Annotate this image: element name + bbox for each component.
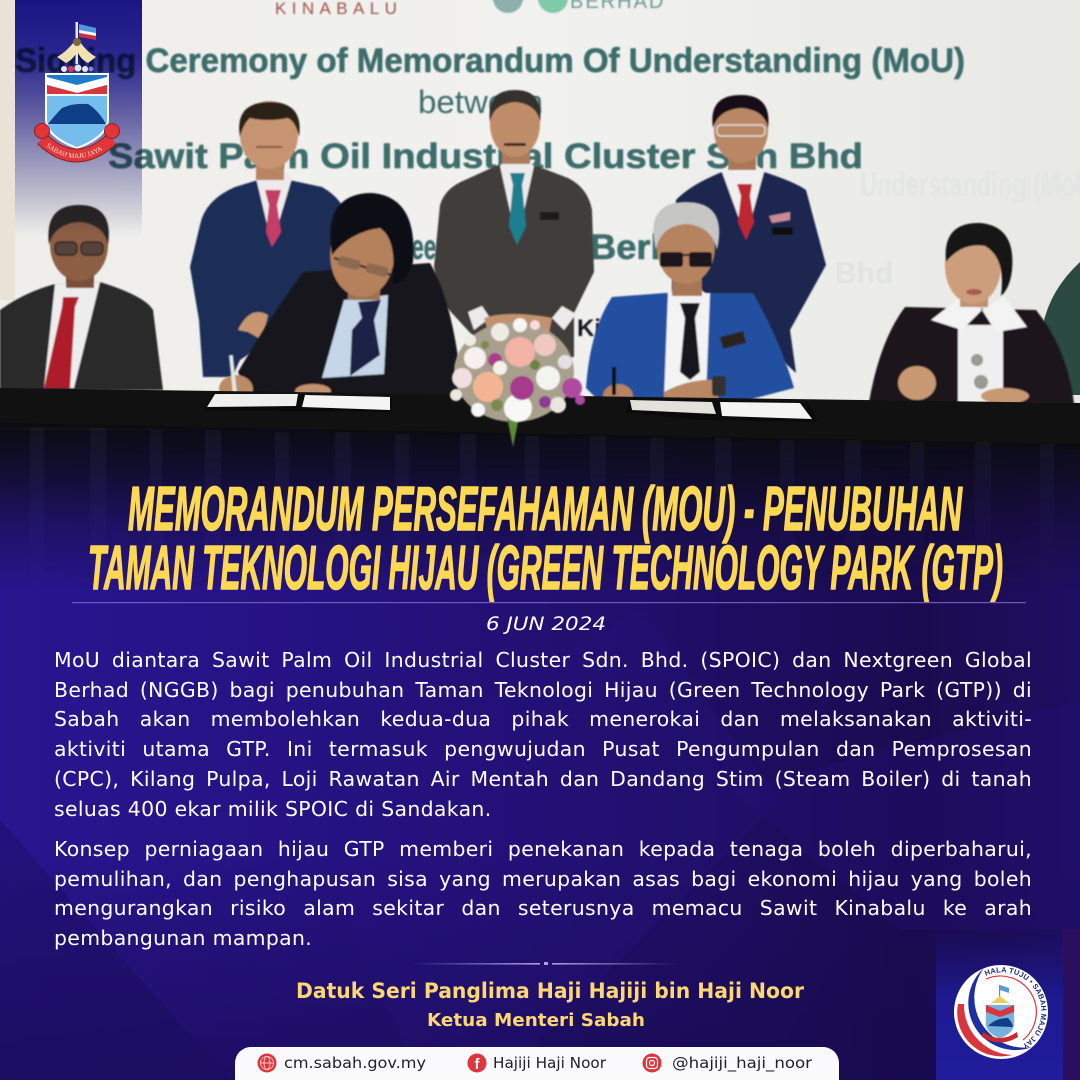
small crest xyxy=(982,985,1018,1042)
Sabah crest xyxy=(34,22,120,162)
person: seated left signing xyxy=(219,193,462,403)
person: standing right xyxy=(672,95,826,373)
flower arrangement xyxy=(450,318,585,447)
backdrop lettering: Signing Ceremony of Memorandum Of Understanding (MoU) xyxy=(15,42,965,80)
text: pemulihan, dan penghapusan sisa yang merupakan asas bagi ekonomi hijau yang boleh xyxy=(54,867,1032,891)
icon: instagram xyxy=(642,1054,662,1072)
backdrop lettering: Berhad xyxy=(590,228,715,267)
person: seated far left xyxy=(0,205,163,390)
backdrop lettering: Nextgreen xyxy=(340,228,450,267)
backdrop lettering xyxy=(15,0,1080,342)
person: standing centre xyxy=(434,90,594,357)
backdrop lettering: Kin xyxy=(577,315,616,342)
contact bar xyxy=(235,1047,839,1080)
article body text xyxy=(54,648,1032,950)
document left xyxy=(204,393,392,412)
date: 6 JUN 2024 xyxy=(486,613,606,635)
person: seated right signing xyxy=(586,202,794,408)
text: Berhad (NGGB) bagi penubuhan Taman Teknologi Hijau (Green Technology Park (GTP)) di xyxy=(54,678,1032,702)
backdrop lettering: Bhd xyxy=(835,257,893,290)
signature divider xyxy=(412,962,678,965)
signing table xyxy=(0,388,1080,578)
document right xyxy=(625,398,818,422)
backdrop lettering: between xyxy=(418,84,543,120)
icon: website xyxy=(258,1054,276,1072)
crest: motto scroll: SABAH MAJU JAYA xyxy=(46,143,102,158)
text: Sabah akan membolehkan kedua-dua pihak menerokai dan melaksanakan aktiviti- xyxy=(54,707,1032,731)
position: Ketua Menteri Sabah xyxy=(427,1010,645,1031)
text: seluas 400 ekar milik SPOIC di Sandakan. xyxy=(54,796,492,820)
crest: shield xyxy=(45,73,109,149)
bottom-right blue ribbon xyxy=(936,930,1063,1080)
name of chief minister: Datuk Seri Panglima Haji Hajiji bin Haji Noor xyxy=(296,979,805,1003)
text: aktiviti utama GTP. Ini termasuk pengwujudan Pusat Pengumpulan dan Pemprosesan xyxy=(54,737,1032,761)
text: MoU diantara Sawit Palm Oil Industrial Cluster Sdn. Bhd. (SPOIC) dan Nextgreen Global xyxy=(54,648,1032,672)
text: Konsep perniagaan hijau GTP memberi penekanan kepada tenaga boleh diperbaharui, xyxy=(54,837,1032,861)
crest: flag and arms xyxy=(57,22,96,72)
text: mengurangkan risiko alam sekitar dan seterusnya memacu Sawit Kinabalu ke arah xyxy=(54,896,1032,920)
backdrop lettering: Sawit Palm Oil Industrial Cluster Sdn Bhd xyxy=(108,137,863,176)
photo: signing ceremony xyxy=(0,0,1080,614)
photo wall backdrop xyxy=(0,0,1080,430)
title xyxy=(88,475,1003,603)
text: (CPC), Kilang Pulpa, Loji Rawatan Air Mentah dan Dandang Stim (Steam Boiler) di tanah xyxy=(54,767,1032,791)
text: pembangunan mampan. xyxy=(54,926,312,950)
facebook text: Hajiji Haji Noor xyxy=(493,1054,607,1072)
top-left blue ribbon xyxy=(15,0,142,236)
icon: facebook: f xyxy=(474,1056,480,1073)
title rule xyxy=(72,602,1026,603)
round logo: Hala Tuju Sabah Maju Jaya: HALA TUJU • SABAH MAJU JAYA xyxy=(984,967,1046,1049)
table skirt pleats xyxy=(0,425,1080,578)
website text: cm.sabah.gov.my xyxy=(284,1054,426,1072)
icon: facebook xyxy=(468,1054,486,1073)
person: seated right woman xyxy=(869,223,1074,404)
person: standing left xyxy=(190,101,350,377)
instagram text: @hajiji_haji_noor xyxy=(672,1054,813,1073)
